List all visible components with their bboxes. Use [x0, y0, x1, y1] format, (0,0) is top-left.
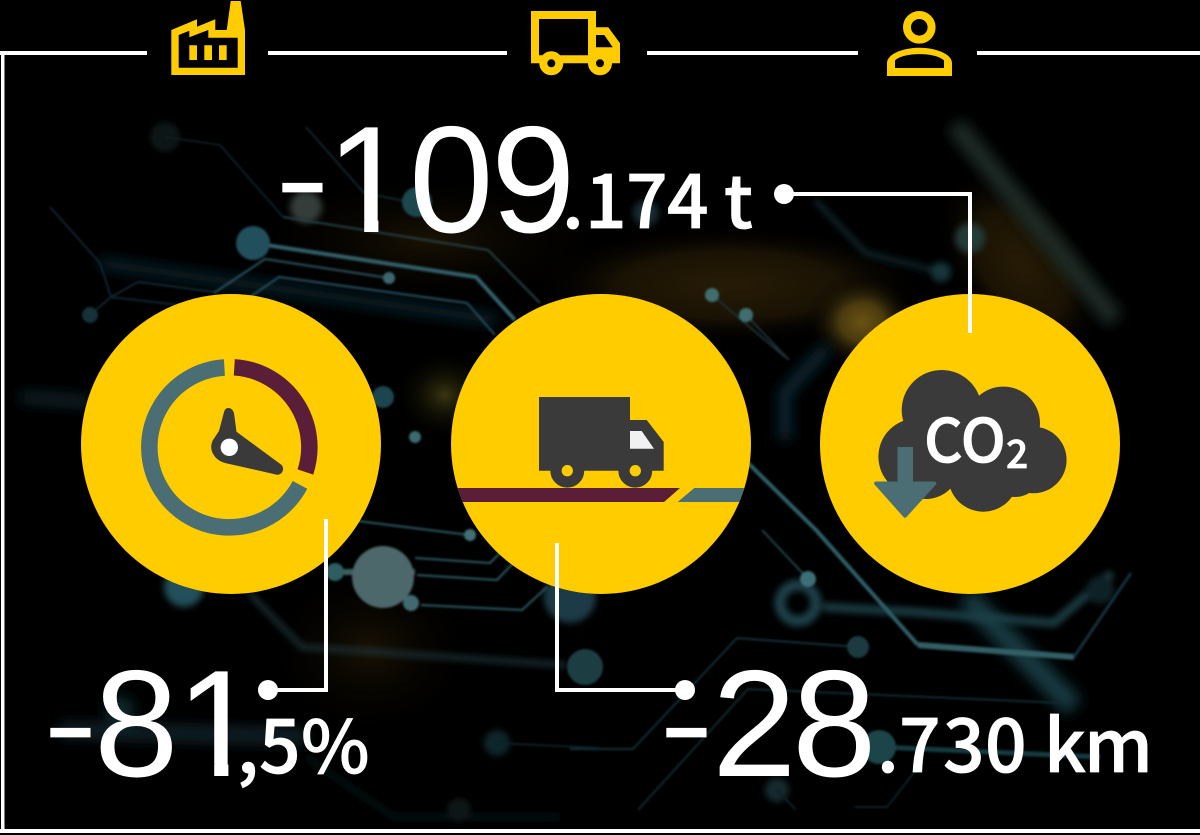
stat: CO2 tonnes: [282, 126, 752, 234]
CO2 label: 2: [1006, 424, 1028, 480]
gauge needle: [211, 408, 283, 475]
stat: time percent: ,5%: [237, 689, 370, 795]
panel: CO2 circle: [820, 294, 1120, 594]
stat: time percent: -: [43, 655, 98, 791]
stat: time percent: 1: [176, 639, 261, 809]
connector: percent: [258, 519, 326, 700]
stat: CO2 tonnes: t: [724, 144, 753, 250]
connector: tonnes: [774, 184, 970, 333]
CO2 label: CO: [924, 393, 1006, 480]
truck illustration: [539, 397, 664, 482]
gauge ring: remaining share: [149, 368, 300, 527]
panel: time circle: [81, 294, 381, 594]
stat: CO2 tonnes: 09: [409, 95, 576, 265]
arrow: down: [874, 447, 936, 518]
stat: kilometres: km: [1044, 688, 1153, 794]
gauge hub: [221, 439, 238, 456]
road: saved: [678, 488, 744, 502]
stat: kilometres: .730: [877, 688, 1027, 794]
cloud: [878, 370, 1067, 512]
stat: time percent: 8: [94, 639, 179, 809]
stat: CO2 tonnes: 1: [326, 95, 411, 265]
icon: factory: [171, 1, 245, 75]
icon: person: [887, 15, 952, 76]
stat: kilometres: [659, 639, 1153, 809]
road: travelled: [450, 488, 680, 502]
connector: kilometres: [557, 543, 695, 700]
stat: kilometres: -: [659, 655, 714, 791]
stat: kilometres: 28: [712, 639, 877, 809]
stat: CO2 tonnes: -: [275, 110, 330, 246]
icon: truck: [531, 11, 620, 71]
stat: CO2 tonnes: .174: [562, 144, 709, 250]
panel: distance circle: [450, 294, 760, 594]
stat: time percent: [50, 670, 368, 788]
gauge ring: saved share: [234, 367, 309, 472]
